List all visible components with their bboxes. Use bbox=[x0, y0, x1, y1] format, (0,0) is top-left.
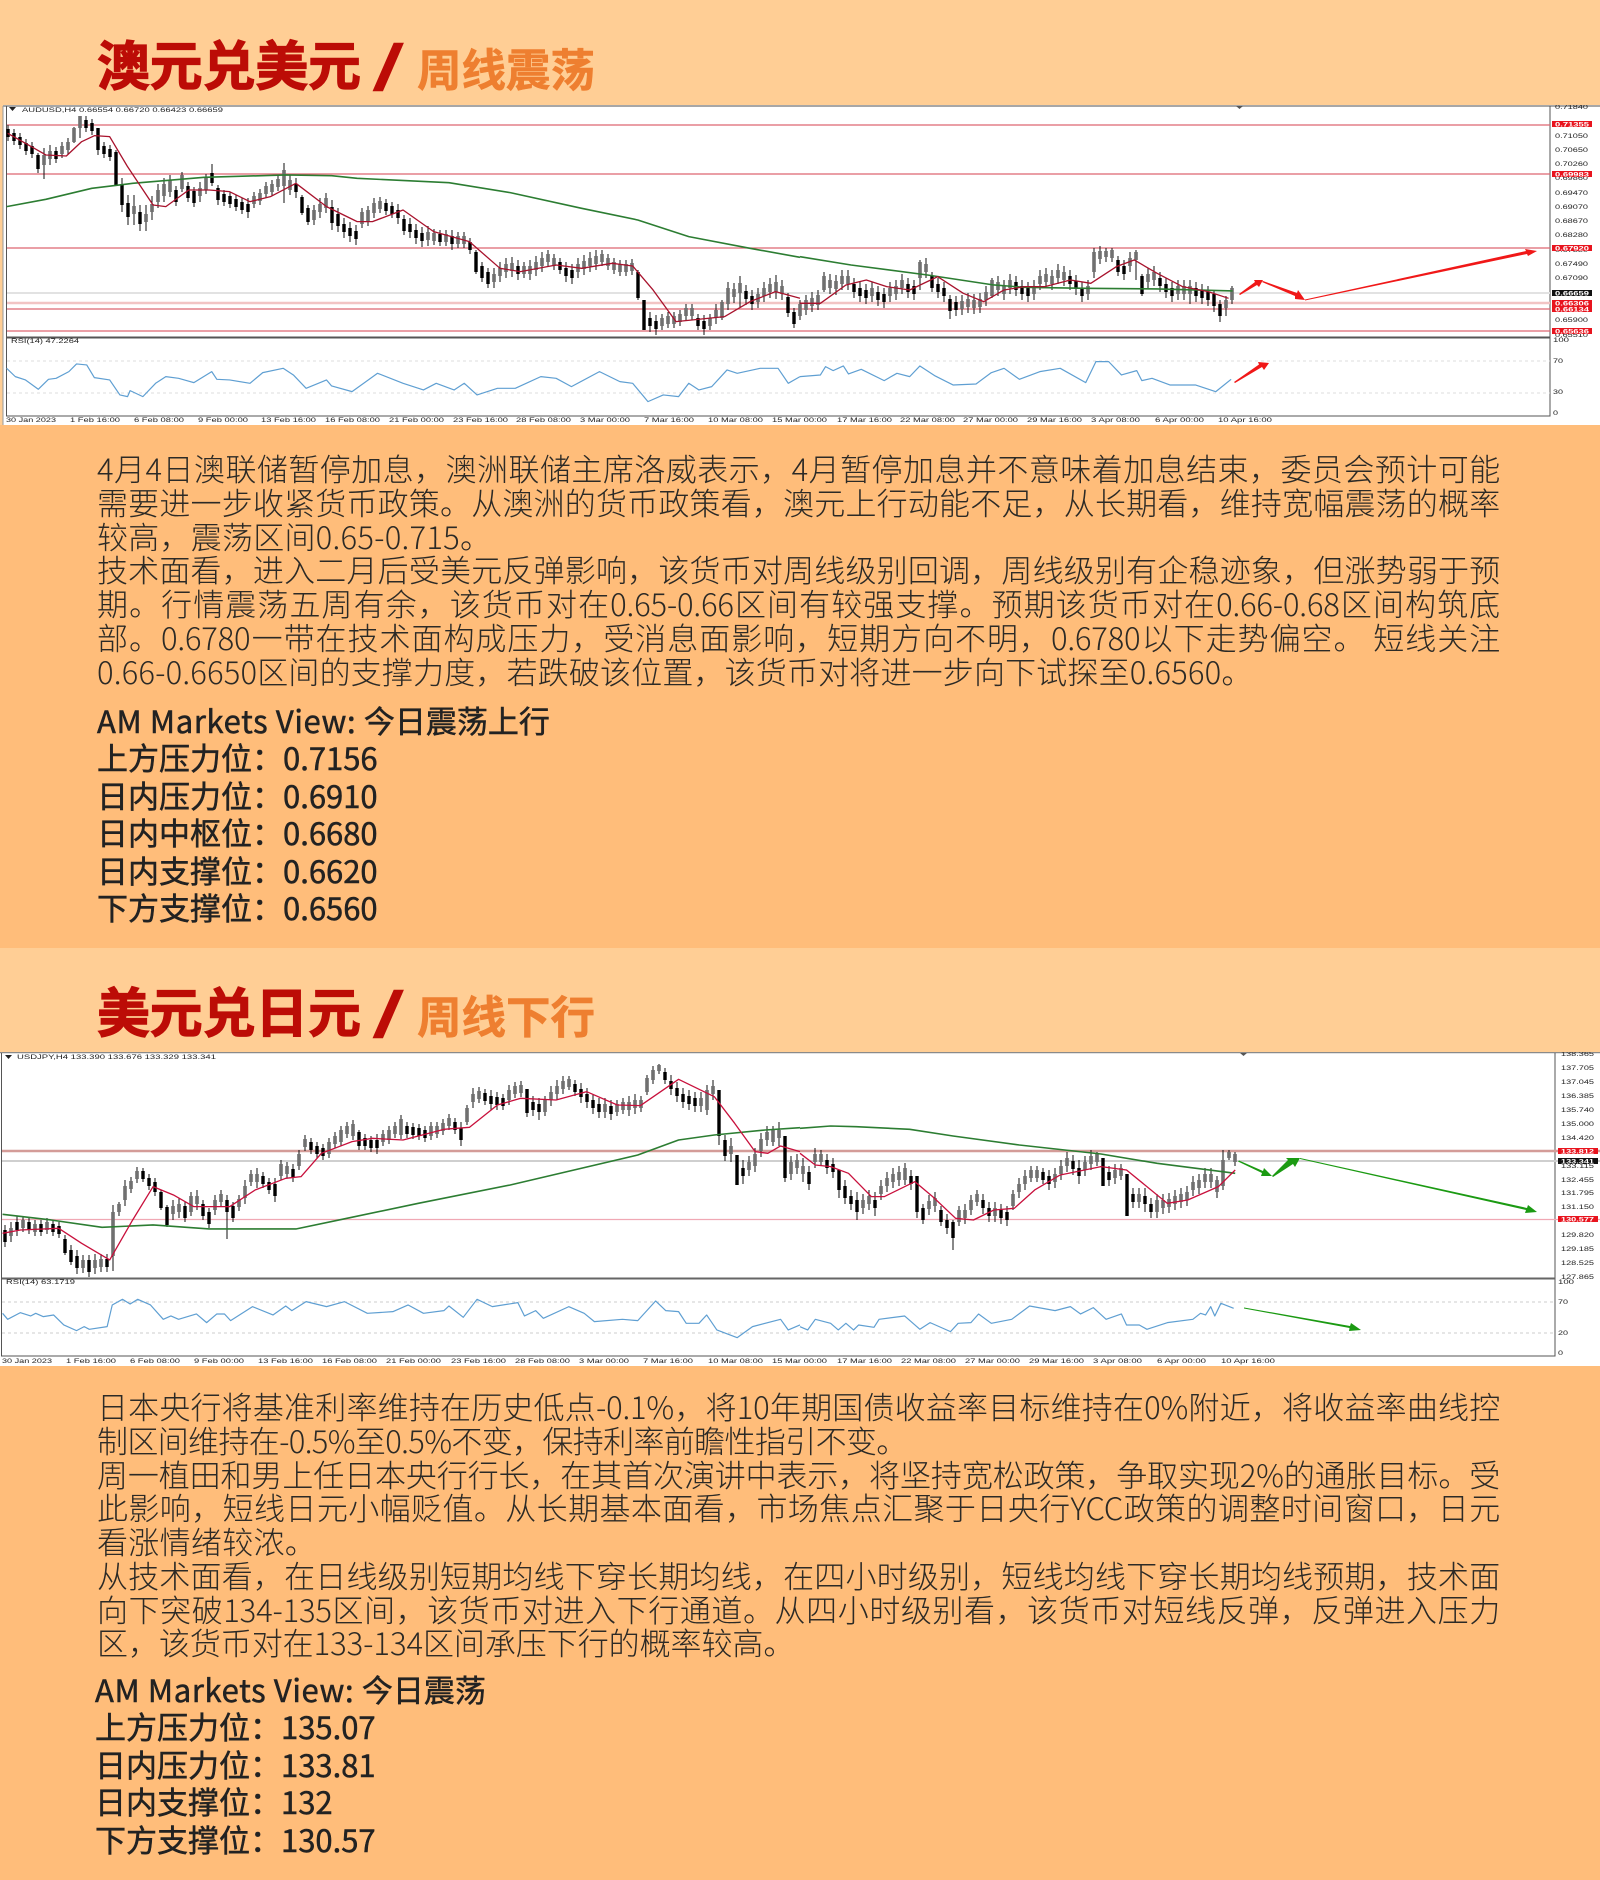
heading: AUD/USD title: 澳元兑美元 bbox=[97, 25, 361, 101]
time axis labels: 28 Feb 08:00 bbox=[515, 1358, 570, 1365]
text block: AUD/USD key levels: 下方支撑位：0.6560 bbox=[97, 884, 378, 929]
RSI line bbox=[7, 338, 1231, 402]
text block: AUD/USD key levels: AM Markets View: 今日震荡上行 bbox=[97, 697, 550, 742]
arrow: RSI up bbox=[1234, 362, 1269, 383]
time axis labels: 9 Feb 00:00 bbox=[194, 1358, 244, 1365]
price axis labels: 0.71050 bbox=[1555, 133, 1588, 140]
time axis labels: 1 Feb 16:00 bbox=[66, 1358, 116, 1365]
price axis labels: 131.150 bbox=[1561, 1204, 1594, 1211]
RSI line: RSI(14) 47.2264 bbox=[11, 338, 79, 345]
time axis labels: 3 Apr 08:00 bbox=[1091, 417, 1140, 424]
price axis labels: 128.525 bbox=[1561, 1260, 1594, 1267]
time axis labels: 17 Mar 16:00 bbox=[837, 1358, 892, 1365]
price axis labels: 100 bbox=[1558, 1279, 1574, 1286]
price candles bbox=[8, 116, 1232, 335]
time axis labels: 15 Mar 00:00 bbox=[772, 417, 827, 424]
time axis labels: 6 Feb 08:00 bbox=[134, 417, 184, 424]
price axis labels: 136.385 bbox=[1561, 1093, 1594, 1100]
price tags: 133.812 bbox=[1561, 1148, 1594, 1156]
arrow: forecast path up bbox=[1239, 249, 1537, 300]
time axis labels: 10 Mar 08:00 bbox=[708, 1358, 763, 1365]
time axis labels: 23 Feb 16:00 bbox=[451, 1358, 506, 1365]
time axis labels: 29 Mar 16:00 bbox=[1027, 417, 1082, 424]
price tags: 0.66306 bbox=[1555, 300, 1589, 308]
price axis labels: 137.705 bbox=[1561, 1065, 1594, 1072]
price label bbox=[9, 106, 1243, 114]
text block: AUD/USD key levels: 上方压力位：0.7156 bbox=[97, 734, 378, 779]
price axis labels: 137.045 bbox=[1561, 1079, 1594, 1086]
panel: AUD/USD header band bbox=[0, 0, 1600, 105]
RSI line bbox=[3, 1279, 1234, 1338]
price axis labels: 132.455 bbox=[1561, 1177, 1594, 1184]
time axis labels: 6 Apr 00:00 bbox=[1155, 417, 1204, 424]
price tags: 0.71355 bbox=[1555, 122, 1589, 128]
time axis labels: 27 Mar 00:00 bbox=[965, 1358, 1020, 1365]
text block: AUD/USD key levels: 日内压力位：0.6910 bbox=[97, 772, 378, 817]
price axis labels: 0.68280 bbox=[1555, 232, 1588, 239]
text block: AUD/USD analysis bbox=[97, 451, 1500, 687]
text block: USD/JPY key levels: 下方支撑位：130.57 bbox=[95, 1816, 376, 1861]
time axis labels: 22 Mar 08:00 bbox=[901, 1358, 956, 1365]
time axis labels: 30 Jan 2023 bbox=[6, 417, 56, 424]
text block: AUD/USD key levels: 日内支撑位：0.6620 bbox=[97, 847, 378, 892]
heading: USD/JPY subtitle: 周线下行 bbox=[417, 981, 595, 1046]
text block: USD/JPY analysis bbox=[97, 1389, 1500, 1659]
price tags: 133.341 bbox=[1561, 1158, 1594, 1166]
long-term moving average bbox=[3, 1126, 1235, 1229]
time axis labels: 16 Feb 08:00 bbox=[325, 417, 380, 424]
time axis labels: 10 Apr 16:00 bbox=[1218, 417, 1272, 424]
price axis labels: 129.185 bbox=[1561, 1246, 1594, 1253]
text block: USD/JPY key levels: 日内支撑位：132 bbox=[95, 1778, 333, 1823]
text block: USD/JPY key levels: AM Markets View: 今日震荡 bbox=[95, 1666, 486, 1711]
time axis labels: 3 Mar 00:00 bbox=[579, 1358, 629, 1365]
price tags bbox=[1558, 1148, 1598, 1224]
price axis labels: 30 bbox=[1553, 389, 1563, 396]
heading: USD/JPY title: 美元兑日元 bbox=[97, 972, 361, 1048]
price axis labels: 129.820 bbox=[1561, 1232, 1594, 1239]
price label bbox=[5, 1053, 1247, 1061]
time axis labels: 22 Mar 08:00 bbox=[900, 417, 955, 424]
time axis labels: 13 Feb 16:00 bbox=[261, 417, 316, 424]
price axis labels: 70 bbox=[1553, 358, 1563, 365]
price tags: 130.577 bbox=[1561, 1216, 1594, 1224]
arrow: forecast path down bbox=[1238, 1158, 1537, 1213]
price tags: 0.67920 bbox=[1555, 246, 1589, 252]
time axis labels bbox=[6, 417, 1272, 424]
time axis labels: 16 Feb 08:00 bbox=[322, 1358, 377, 1365]
price axis labels: 0.68670 bbox=[1555, 218, 1588, 225]
price axis labels: 135.000 bbox=[1561, 1121, 1594, 1128]
price axis labels: 134.420 bbox=[1561, 1135, 1594, 1142]
time axis labels: 10 Apr 16:00 bbox=[1221, 1358, 1275, 1365]
price axis labels: 135.740 bbox=[1561, 1107, 1594, 1114]
RSI line: RSI(14) 63.1719 bbox=[6, 1279, 75, 1286]
time axis labels: 7 Mar 16:00 bbox=[644, 417, 694, 424]
time axis labels: 21 Feb 00:00 bbox=[389, 417, 444, 424]
price axis labels: 20 bbox=[1558, 1330, 1568, 1337]
price axis labels: 0.67090 bbox=[1555, 275, 1588, 282]
heading: AUD/USD subtitle: 周线震荡 bbox=[417, 34, 595, 99]
time axis labels: 29 Mar 16:00 bbox=[1029, 1358, 1084, 1365]
price tags: 0.69983 bbox=[1555, 172, 1589, 178]
time axis labels: 3 Apr 08:00 bbox=[1093, 1358, 1142, 1365]
price tags: 0.65636 bbox=[1555, 328, 1589, 336]
text block: AUD/USD key levels bbox=[96, 697, 550, 929]
heading: title slash: / bbox=[374, 32, 402, 104]
price axis labels: 70 bbox=[1558, 1299, 1568, 1306]
text block: USD/JPY key levels: 日内压力位：133.81 bbox=[95, 1741, 376, 1786]
time axis labels: 17 Mar 16:00 bbox=[837, 417, 892, 424]
price axis labels: 127.865 bbox=[1561, 1274, 1594, 1281]
price axis labels: 0.65510 bbox=[1555, 332, 1588, 339]
price axis labels: 0 bbox=[1558, 1350, 1563, 1357]
panel: USD/JPY header band bbox=[0, 948, 1600, 1052]
time axis labels: 28 Feb 08:00 bbox=[516, 417, 571, 424]
text block: USD/JPY key levels: 上方压力位：135.07 bbox=[95, 1703, 376, 1748]
price axis labels: 0.67490 bbox=[1555, 261, 1588, 268]
short-term moving average bbox=[3, 1079, 1235, 1260]
time axis labels: 1 Feb 16:00 bbox=[70, 417, 120, 424]
heading: title slash: / bbox=[374, 979, 402, 1051]
text block: AUD/USD key levels: 日内中枢位：0.6680 bbox=[97, 809, 378, 854]
time axis labels: 10 Mar 08:00 bbox=[708, 417, 763, 424]
time axis labels: 21 Feb 00:00 bbox=[386, 1358, 441, 1365]
price axis labels: 0.69070 bbox=[1555, 204, 1588, 211]
short-term moving average bbox=[8, 133, 1229, 322]
price axis labels: 0.69470 bbox=[1555, 190, 1588, 197]
time axis labels: 7 Mar 16:00 bbox=[643, 1358, 693, 1365]
time axis labels: 30 Jan 2023 bbox=[2, 1358, 52, 1365]
price axis labels bbox=[1553, 104, 1588, 417]
price axis labels bbox=[1558, 1051, 1594, 1357]
time axis labels: 27 Mar 00:00 bbox=[963, 417, 1018, 424]
price axis labels: 0.70260 bbox=[1555, 161, 1588, 168]
price axis labels: 0.69860 bbox=[1555, 175, 1588, 182]
price label: AUDUSD,H4 0.66554 0.66720 0.66423 0.66659 bbox=[22, 107, 223, 114]
time axis labels: 9 Feb 00:00 bbox=[198, 417, 248, 424]
price tags bbox=[1552, 121, 1592, 336]
price tags: 0.66659 bbox=[1555, 290, 1589, 298]
price candles bbox=[5, 1064, 1235, 1277]
time axis labels: 3 Mar 00:00 bbox=[580, 417, 630, 424]
time axis labels: 6 Feb 08:00 bbox=[130, 1358, 180, 1365]
price label: USDJPY,H4 133.390 133.676 133.329 133.341 bbox=[17, 1054, 216, 1061]
time axis labels: 15 Mar 00:00 bbox=[772, 1358, 827, 1365]
time axis labels bbox=[2, 1358, 1275, 1365]
price axis labels: 0.65900 bbox=[1555, 317, 1588, 324]
price tags: 0.66134 bbox=[1555, 306, 1589, 314]
time axis labels: 23 Feb 16:00 bbox=[453, 417, 508, 424]
time axis labels: 13 Feb 16:00 bbox=[258, 1358, 313, 1365]
price axis labels: 0.70650 bbox=[1555, 147, 1588, 154]
chart: AUD/USD H4 candlestick and RSI bbox=[0, 105, 1600, 425]
arrow: RSI down bbox=[1244, 1308, 1361, 1331]
price axis labels: 131.795 bbox=[1561, 1190, 1594, 1197]
long-term moving average bbox=[7, 175, 1233, 291]
price axis labels: 0.67880 bbox=[1555, 247, 1588, 254]
chart: USD/JPY H4 candlestick and RSI bbox=[0, 1052, 1600, 1366]
price axis labels: 0 bbox=[1553, 410, 1558, 417]
time axis labels: 6 Apr 00:00 bbox=[1157, 1358, 1206, 1365]
price axis labels: 133.115 bbox=[1561, 1163, 1594, 1170]
text block: USD/JPY key levels bbox=[94, 1666, 486, 1861]
price axis labels: 100 bbox=[1553, 337, 1569, 344]
